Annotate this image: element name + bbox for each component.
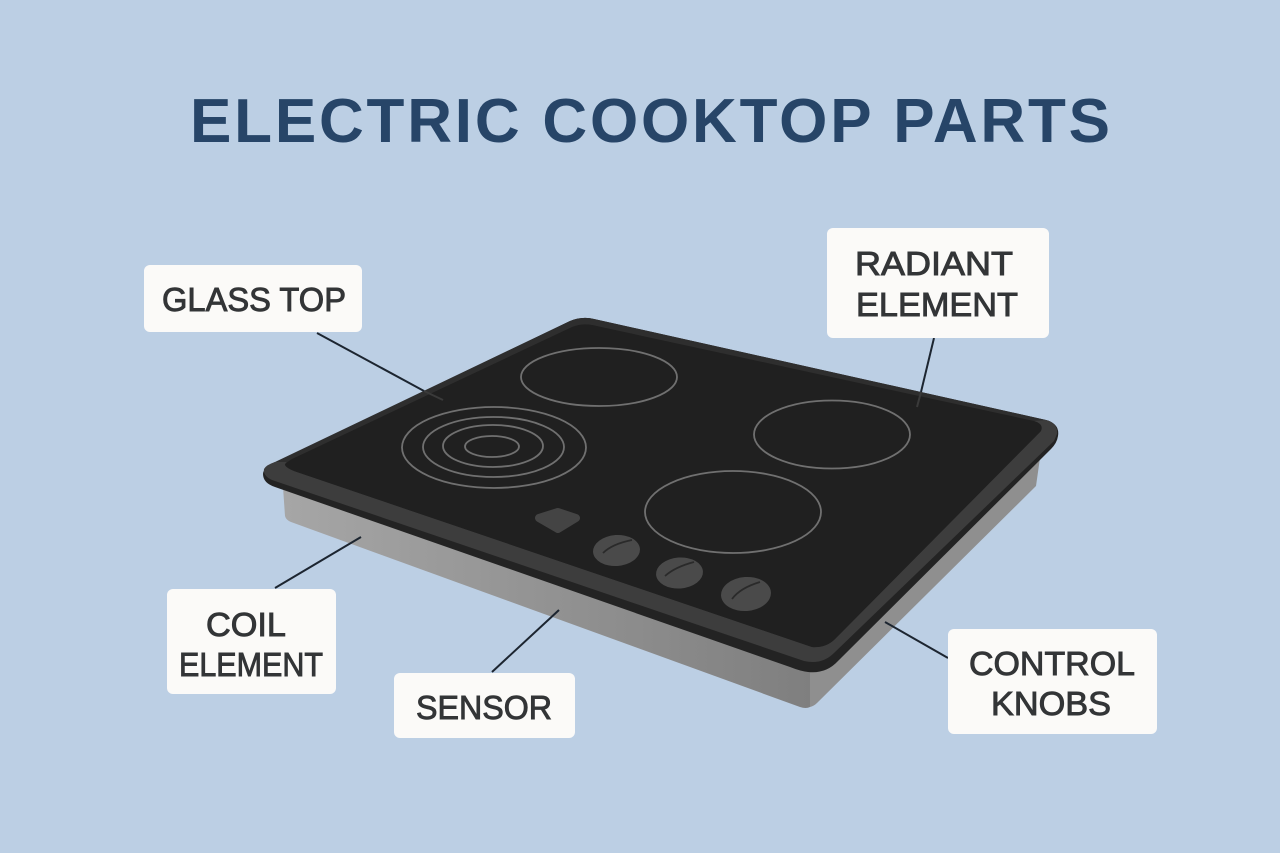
leader line: coil element <box>275 537 361 588</box>
leader line: radiant element <box>921 338 934 392</box>
knob 1 <box>592 533 641 568</box>
label: glass top: GLASS TOP <box>162 281 346 318</box>
rim: upper bevel <box>264 318 1057 478</box>
label: coil element <box>167 589 336 694</box>
leader line: radiant continuation on surface <box>917 392 921 407</box>
cooktop base: right side <box>810 458 1040 707</box>
label: radiant element <box>827 228 1049 338</box>
label: coil element: COIL <box>206 606 286 643</box>
label: radiant element: RADIANT <box>855 245 1013 282</box>
leader line: glass top <box>317 333 424 391</box>
sensor pad <box>539 512 576 529</box>
label: sensor <box>394 673 575 738</box>
leader line: control knobs <box>885 622 948 658</box>
label: control knobs: CONTROL <box>969 645 1135 682</box>
coil element <box>402 407 586 488</box>
burner: rear left <box>521 348 677 406</box>
title: ELECTRIC COOKTOP PARTS <box>190 87 1110 156</box>
label: radiant element: ELEMENT <box>856 286 1018 323</box>
rim: dark underside <box>263 318 1058 672</box>
label: sensor: SENSOR <box>416 689 552 726</box>
burner: front <box>645 471 821 553</box>
leader line: sensor <box>492 610 559 672</box>
rim: front and right bevel <box>264 420 1057 662</box>
label: coil element: ELEMENT <box>179 646 323 683</box>
leader line: glass top continuation on surface <box>424 391 443 400</box>
knob 2 <box>655 556 704 590</box>
label: control knobs: KNOBS <box>991 685 1111 722</box>
glass top surface <box>285 324 1042 647</box>
knob 3 <box>720 575 772 613</box>
cooktop base: left side <box>283 487 810 708</box>
burner: radiant right <box>754 400 910 468</box>
cooktop illustration <box>263 318 1058 708</box>
label: control knobs <box>948 629 1157 734</box>
label: glass top <box>144 265 362 332</box>
